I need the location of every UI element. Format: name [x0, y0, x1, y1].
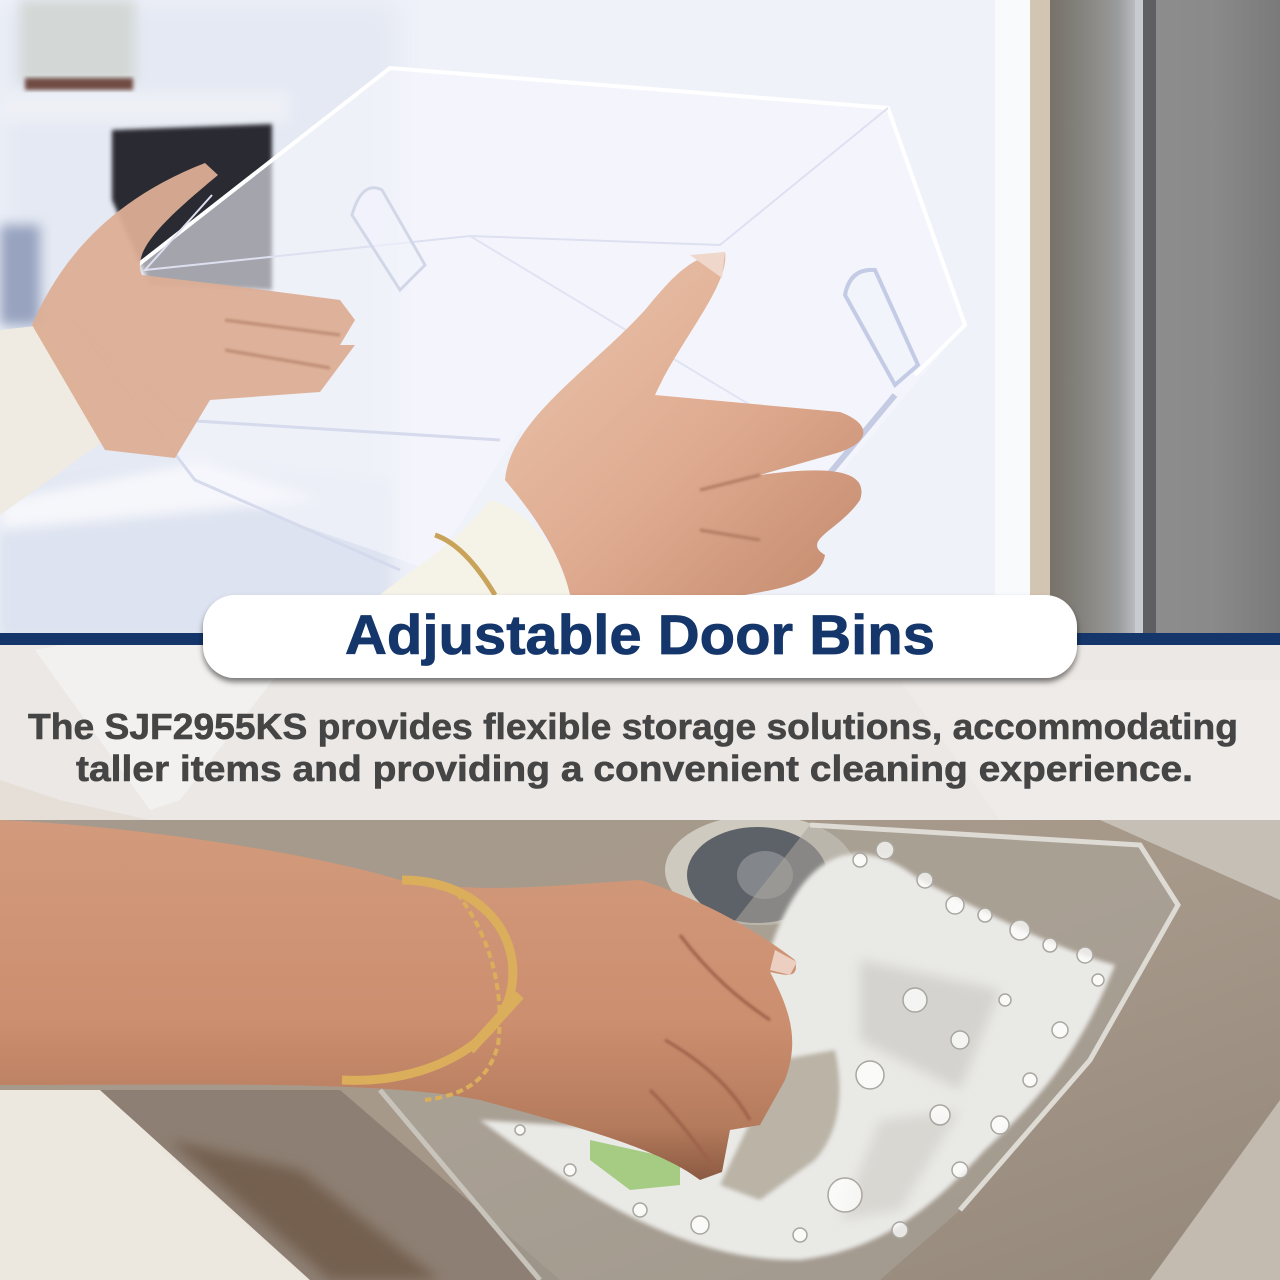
navy divider rule	[0, 633, 1280, 645]
foam bubbles	[515, 841, 1104, 1242]
forearm and hand	[0, 820, 797, 1180]
heading pill	[203, 595, 1077, 678]
heading: Adjustable Door Bins	[345, 603, 935, 666]
body text: taller items and providing a convenient cleaning experience.	[76, 748, 1193, 789]
left hand and sleeve	[0, 163, 355, 515]
right hand and wristband	[380, 252, 863, 595]
refrigerator door edge	[1030, 0, 1280, 640]
photo: hands holding clear door bin at refrigerator	[0, 0, 1280, 640]
photo: washing bin in sudsy sink	[0, 815, 1280, 1280]
gold bracelets	[342, 880, 520, 1100]
body text: The SJF2955KS provides flexible storage solutions, accommodating	[28, 706, 1238, 747]
body text	[28, 706, 1238, 789]
background shelf and dark container	[0, 0, 390, 640]
clear bin full of soap foam	[380, 825, 1178, 1280]
clear plastic bin	[70, 68, 965, 570]
sink drain	[665, 815, 855, 925]
translucent text band	[0, 645, 1280, 820]
